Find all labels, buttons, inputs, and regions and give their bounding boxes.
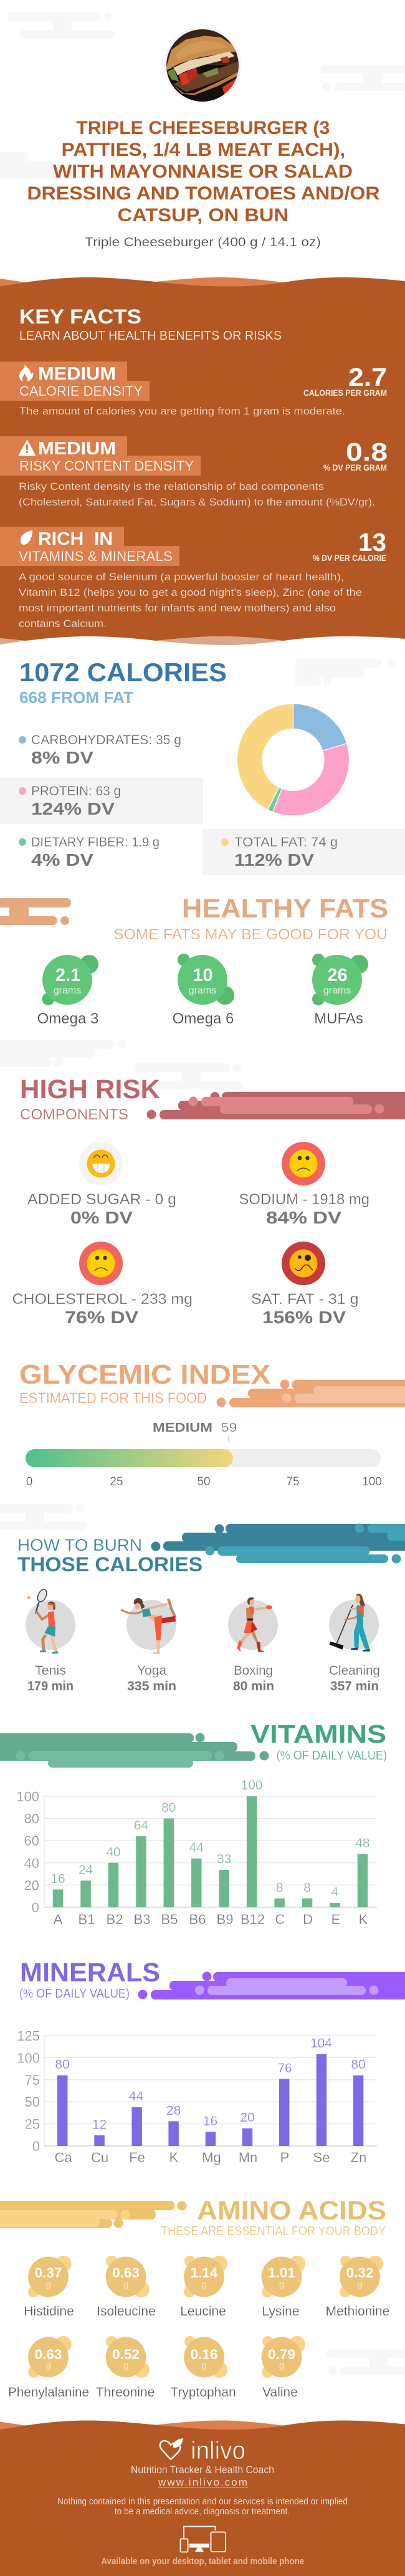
omega 3: grams: [54, 985, 81, 996]
cholesterol: 76% DV: [65, 1308, 138, 1327]
donut chart: [237, 704, 350, 816]
bar chart: minerals: 20: [240, 2110, 255, 2125]
heading: healthy fats: SOME FATS MAY BE GOOD FOR YOU: [113, 926, 388, 943]
panel: how to burn calories: [17, 1523, 405, 1693]
risky content value: % DV PER GRAM: [323, 463, 387, 472]
calorie density label: MEDIUM: [38, 364, 116, 384]
threonine: g: [123, 2360, 128, 2371]
risky content value: [323, 438, 388, 472]
decoration: minerals band: [138, 1972, 405, 1999]
dietary fiber: [19, 835, 160, 869]
saturated fat: 156% DV: [262, 1308, 346, 1327]
icon: warning triangle: [19, 440, 36, 456]
heading: minerals: (% OF DAILY VALUE): [19, 1987, 130, 2001]
vitamins and minerals description: A good source of Selenium (a powerful booster of heart health),: [19, 572, 344, 583]
decoration: amino band: [0, 2201, 187, 2228]
omega 6: [173, 954, 234, 1027]
heading: healthy fats: [113, 894, 388, 943]
heading: minerals: [19, 1958, 160, 2001]
bar chart: vitamins: B5: [161, 1912, 178, 1927]
bar chart: vitamins: 4: [331, 1885, 339, 1899]
lysine: g: [279, 2279, 284, 2290]
bar chart: vitamins: 40: [106, 1845, 121, 1859]
mufas: MUFAs: [314, 1010, 363, 1027]
bar chart: vitamins: B2: [107, 1912, 123, 1927]
isoleucine: 0.63: [112, 2265, 140, 2281]
vitamins and minerals description: Vitamin B12 (helps you to get a good night's sleep), Zinc (one of the: [19, 587, 362, 598]
bar chart: vitamins: B9: [217, 1912, 233, 1927]
bar chart: vitamins: 80: [24, 1811, 39, 1827]
heading: healthy fats: HEALTHY FATS: [182, 894, 388, 924]
vitamins and minerals description: [19, 572, 362, 630]
bar chart: minerals: 28: [166, 2104, 181, 2118]
methionine: [326, 2256, 389, 2319]
glycemic value: 59: [221, 1421, 237, 1435]
heading: amino acids: THESE ARE ESSENTIAL FOR YOUR BODY: [161, 2224, 386, 2238]
title: PATTIES, 1/4 LB MEAT EACH),: [62, 140, 345, 160]
activity: tennis: 179 min: [27, 1679, 74, 1693]
bar chart: vitamins: D: [303, 1912, 313, 1927]
protein: [19, 784, 121, 818]
bar chart: vitamins: 33: [217, 1852, 231, 1866]
logo: inlivo: inlivo: [191, 2437, 245, 2464]
isoleucine: g: [123, 2279, 128, 2290]
lysine: Lysine: [262, 2304, 299, 2319]
lysine: 1.01: [268, 2265, 295, 2281]
tryptophan: [170, 2336, 236, 2400]
bar chart: minerals: 125: [17, 2028, 40, 2044]
vitamins and minerals value: 13: [358, 528, 386, 557]
activity: cleaning: Cleaning: [329, 1664, 380, 1678]
activity: boxing: 80 min: [233, 1679, 274, 1693]
bar chart: vitamins: E: [331, 1912, 340, 1927]
mufas: [312, 954, 368, 1027]
title: WITH MAYONNAISE OR SALAD: [53, 161, 353, 182]
valine: g: [279, 2360, 284, 2371]
bar chart: vitamins: B12: [241, 1912, 265, 1927]
bar chart: minerals: Zn: [351, 2150, 366, 2165]
lysine: [262, 2256, 305, 2319]
title: CATSUP, ON BUN: [118, 205, 288, 226]
decoration: high risk band: [147, 1092, 405, 1119]
bar chart: minerals: 16: [203, 2114, 217, 2128]
bar chart: vitamins: [16, 1778, 377, 1927]
vitamins and minerals value: % DV PER CALORIE: [313, 553, 386, 563]
risky content value: 0.8: [346, 438, 388, 466]
bar chart: vitamins: K: [359, 1912, 368, 1927]
glycemic value: MEDIUM: [153, 1421, 212, 1435]
protein: 124% DV: [31, 799, 115, 818]
bar chart: vitamins: 80: [161, 1801, 176, 1815]
activity: tennis: [26, 1588, 75, 1693]
heading: how to burn: THOSE CALORIES: [17, 1553, 202, 1576]
bar chart: minerals: K: [169, 2150, 179, 2165]
heading: glycemic index: ESTIMATED FOR THIS FOOD: [19, 1390, 207, 1407]
threonine: Threonine: [96, 2385, 155, 2400]
bar chart: minerals: Cu: [91, 2150, 108, 2165]
bar chart: minerals: 104: [310, 2036, 332, 2051]
heading: high risk: COMPONENTS: [20, 1106, 128, 1123]
leucine: [180, 2256, 227, 2319]
methionine: 0.32: [346, 2265, 373, 2281]
vitamins and minerals value: [313, 528, 386, 563]
dietary fiber: DIETARY FIBER: 1.9 g: [31, 835, 160, 850]
calorie density description: The amount of calories you are getting from 1 gram is moderate.: [19, 406, 345, 417]
heading: calories: 668 FROM FAT: [19, 688, 133, 707]
phenylalanine: 0.63: [35, 2347, 62, 2362]
carbohydrates: 8% DV: [31, 748, 93, 767]
total fat: TOTAL FAT: 74 g: [234, 835, 338, 850]
leucine: g: [201, 2279, 207, 2290]
bar chart: minerals: 80: [55, 2057, 70, 2072]
valine: 0.79: [268, 2347, 295, 2362]
saturated fat: SAT. FAT - 31 g: [251, 1291, 359, 1308]
bar chart: vitamins: A: [54, 1912, 63, 1927]
isoleucine: Isoleucine: [97, 2304, 156, 2319]
heading: vitamins: (% OF DAILY VALUE): [277, 1749, 387, 1763]
glycemic gauge: [26, 1449, 382, 1488]
added sugar: 0% DV: [70, 1208, 133, 1227]
bar chart: minerals: [17, 2028, 377, 2165]
dietary fiber: 4% DV: [31, 850, 93, 869]
heading: key facts: [19, 305, 282, 343]
panel: vitamins: [0, 1720, 387, 1927]
title: TRIPLE CHEESEBURGER (3: [76, 118, 330, 138]
disclaimer: [57, 2497, 348, 2517]
logo: inlivo: [160, 2437, 245, 2464]
valine: Valine: [262, 2385, 298, 2400]
activity: boxing: Boxing: [234, 1664, 273, 1678]
bar chart: vitamins: C: [275, 1912, 285, 1927]
decoration: burn band: [151, 1523, 405, 1563]
cholesterol: [12, 1242, 193, 1327]
mufas: 26: [327, 965, 348, 985]
vitamins and minerals label: VITAMINS & MINERALS: [19, 548, 173, 564]
bar chart: minerals: 75: [25, 2072, 40, 2088]
histidine: [24, 2256, 74, 2319]
bar chart: vitamins: B3: [134, 1912, 150, 1927]
heading: glycemic index: GLYCEMIC INDEX: [19, 1359, 270, 1390]
decoration: healthy fats band: [0, 898, 71, 925]
threonine: [96, 2336, 155, 2400]
activity: yoga: 335 min: [127, 1679, 176, 1693]
heading: high risk: [20, 1075, 160, 1123]
heading: calories: [19, 658, 227, 707]
risky content description: (Cholesterol, Saturated Fat, Sugars & Sodium) to the amount (%DV/gr).: [19, 497, 375, 508]
phenylalanine: [8, 2336, 89, 2400]
vitamins and minerals description: contains Calcium.: [19, 618, 107, 630]
saturated fat: [251, 1242, 359, 1327]
availability note: Available on your desktop, tablet and mobile phone: [101, 2556, 304, 2567]
calorie density value: CALORIES PER GRAM: [303, 388, 387, 398]
omega 6: Omega 6: [173, 1010, 234, 1027]
vitamins and minerals label: [0, 527, 179, 566]
heading: how to burn: [17, 1536, 202, 1576]
cholesterol: CHOLESTEROL - 233 mg: [12, 1291, 193, 1308]
mufas: grams: [323, 985, 351, 996]
disclaimer: Nothing contained in this presentation and our services is intended or implied: [57, 2497, 348, 2507]
vitamins and minerals label: RICH IN: [38, 529, 113, 549]
glycemic gauge: 75: [286, 1475, 300, 1488]
calorie density value: [303, 363, 387, 398]
bar chart: vitamins: 44: [189, 1841, 204, 1855]
carbohydrates: CARBOHYDRATES: 35 g: [31, 733, 181, 747]
calorie density label: [0, 362, 150, 401]
glycemic gauge: 100: [362, 1475, 382, 1488]
bar chart: minerals: P: [280, 2150, 289, 2165]
title: [27, 118, 380, 226]
omega 3: 2.1: [55, 965, 80, 985]
website link: www.inlivo.com: [158, 2476, 247, 2488]
sodium: [239, 1142, 369, 1227]
heading: key facts: LEARN ABOUT HEALTH BENEFITS OR RISKS: [19, 329, 282, 343]
bar chart: vitamins: 0: [32, 1900, 39, 1915]
omega 3: Omega 3: [37, 1010, 98, 1027]
food photo: burger: [163, 27, 242, 106]
activity: cleaning: [329, 1594, 380, 1693]
bar chart: vitamins: B1: [79, 1912, 95, 1927]
bar chart: minerals: 25: [25, 2117, 40, 2132]
bar chart: vitamins: 8: [303, 1880, 311, 1895]
glycemic gauge: 0: [26, 1475, 32, 1488]
risky content label: [0, 436, 201, 476]
heading: calories: 1072 CALORIES: [19, 658, 227, 687]
total fat: [221, 835, 338, 869]
histidine: g: [45, 2279, 51, 2290]
icon: flame: [19, 365, 33, 381]
phenylalanine: g: [45, 2360, 51, 2371]
bar chart: minerals: 100: [17, 2050, 40, 2066]
phenylalanine: Phenylalanine: [8, 2385, 89, 2400]
leucine: 1.14: [191, 2265, 218, 2281]
risky content description: Risky Content density is the relationship of bad components: [19, 481, 324, 492]
activity: boxing: [228, 1597, 278, 1693]
heading: amino acids: [161, 2196, 386, 2238]
title: DRESSING AND TOMATOES AND/OR: [27, 183, 380, 204]
bar chart: minerals: 80: [351, 2057, 366, 2072]
bar chart: minerals: Se: [313, 2150, 330, 2165]
risky content description: [19, 481, 375, 508]
footer: [0, 2421, 405, 2576]
row backgrounds: [0, 778, 405, 875]
bar chart: vitamins: 48: [355, 1836, 370, 1851]
total fat: 112% DV: [234, 850, 314, 869]
panel: key facts: [0, 277, 405, 645]
bar chart: minerals: 0: [32, 2138, 40, 2154]
tagline: Nutrition Tracker & Health Coach: [131, 2464, 274, 2476]
calorie density value: 2.7: [348, 363, 387, 391]
omega 6: grams: [189, 985, 216, 996]
heading: glycemic index: [19, 1359, 270, 1407]
bar chart: minerals: 12: [92, 2118, 107, 2132]
glycemic value: [153, 1421, 237, 1442]
carbohydrates: [19, 733, 181, 767]
bar chart: minerals: Ca: [54, 2150, 72, 2165]
bar chart: minerals: 50: [25, 2094, 40, 2110]
heading: vitamins: VITAMINS: [250, 1720, 386, 1748]
bar chart: minerals: 44: [129, 2089, 143, 2104]
added sugar: [27, 1142, 176, 1227]
decoration: vitamins band: [0, 1733, 269, 1768]
valine: [262, 2336, 305, 2400]
isoleucine: [97, 2256, 156, 2319]
bar chart: minerals: 76: [277, 2061, 292, 2076]
panel: calories: [0, 658, 405, 875]
panel: glycemic index: [19, 1359, 405, 1488]
activity: yoga: Yoga: [137, 1664, 166, 1678]
tryptophan: Tryptophan: [170, 2385, 236, 2400]
protein: PROTEIN: 63 g: [31, 784, 121, 798]
histidine: Histidine: [24, 2304, 74, 2319]
threonine: 0.52: [112, 2347, 140, 2362]
heading: vitamins: [250, 1720, 387, 1763]
heading: amino acids: AMINO ACIDS: [197, 2196, 386, 2226]
panel: high risk components: [12, 1075, 405, 1327]
icon: devices: [181, 2527, 226, 2552]
heading: key facts: KEY FACTS: [19, 305, 141, 328]
bar chart: vitamins: B6: [189, 1912, 206, 1927]
glycemic gauge: 50: [197, 1475, 211, 1488]
icon: leaf: [21, 530, 32, 545]
glycemic gauge: 25: [110, 1475, 123, 1488]
vitamins and minerals description: most important nutrients for infants and new mothers) and also: [19, 603, 336, 614]
panel: amino acids: [0, 2196, 389, 2400]
tryptophan: g: [201, 2360, 207, 2371]
bar chart: vitamins: 16: [50, 1872, 65, 1886]
omega 6: 10: [193, 965, 213, 985]
activity: cleaning: 357 min: [330, 1679, 379, 1693]
bar chart: minerals: Mn: [239, 2150, 257, 2165]
risky content label: MEDIUM: [38, 439, 116, 459]
bar chart: vitamins: 40: [24, 1855, 39, 1871]
sodium: SODIUM - 1918 mg: [239, 1191, 369, 1208]
bar chart: vitamins: 100: [16, 1789, 39, 1804]
omega 3: [37, 955, 98, 1027]
bar chart: vitamins: 100: [241, 1778, 263, 1793]
bar chart: minerals: Mg: [202, 2150, 221, 2165]
serving size: Triple Cheeseburger (400 g / 14.1 oz): [85, 235, 321, 249]
decoration: glycemic band: [217, 1380, 405, 1407]
bar chart: vitamins: 20: [24, 1877, 39, 1893]
panel: minerals: [17, 1958, 405, 2165]
heading: minerals: MINERALS: [20, 1958, 160, 1988]
bar chart: vitamins: 24: [79, 1863, 93, 1877]
bar chart: vitamins: 60: [24, 1833, 39, 1849]
methionine: Methionine: [326, 2304, 389, 2319]
panel: healthy fats: [0, 894, 388, 1027]
bar chart: vitamins: 8: [276, 1880, 283, 1895]
tryptophan: 0.16: [191, 2347, 217, 2362]
calorie density label: CALORIE DENSITY: [19, 383, 143, 399]
bar chart: minerals: Fe: [129, 2150, 145, 2165]
histidine: 0.37: [35, 2265, 62, 2281]
activity: tennis: Tenis: [35, 1664, 66, 1678]
sodium: 84% DV: [266, 1208, 341, 1227]
heading: high risk: HIGH RISK: [20, 1075, 160, 1104]
disclaimer: to be a medical advice, diagnosis or treatment.: [115, 2507, 290, 2517]
leucine: Leucine: [180, 2304, 226, 2319]
activity: yoga: [121, 1598, 176, 1693]
risky content label: RISKY CONTENT DENSITY: [19, 458, 194, 474]
bar chart: vitamins: 64: [134, 1819, 148, 1833]
heading: how to burn: HOW TO BURN: [17, 1536, 142, 1554]
added sugar: ADDED SUGAR - 0 g: [27, 1191, 176, 1208]
methionine: g: [357, 2279, 363, 2290]
